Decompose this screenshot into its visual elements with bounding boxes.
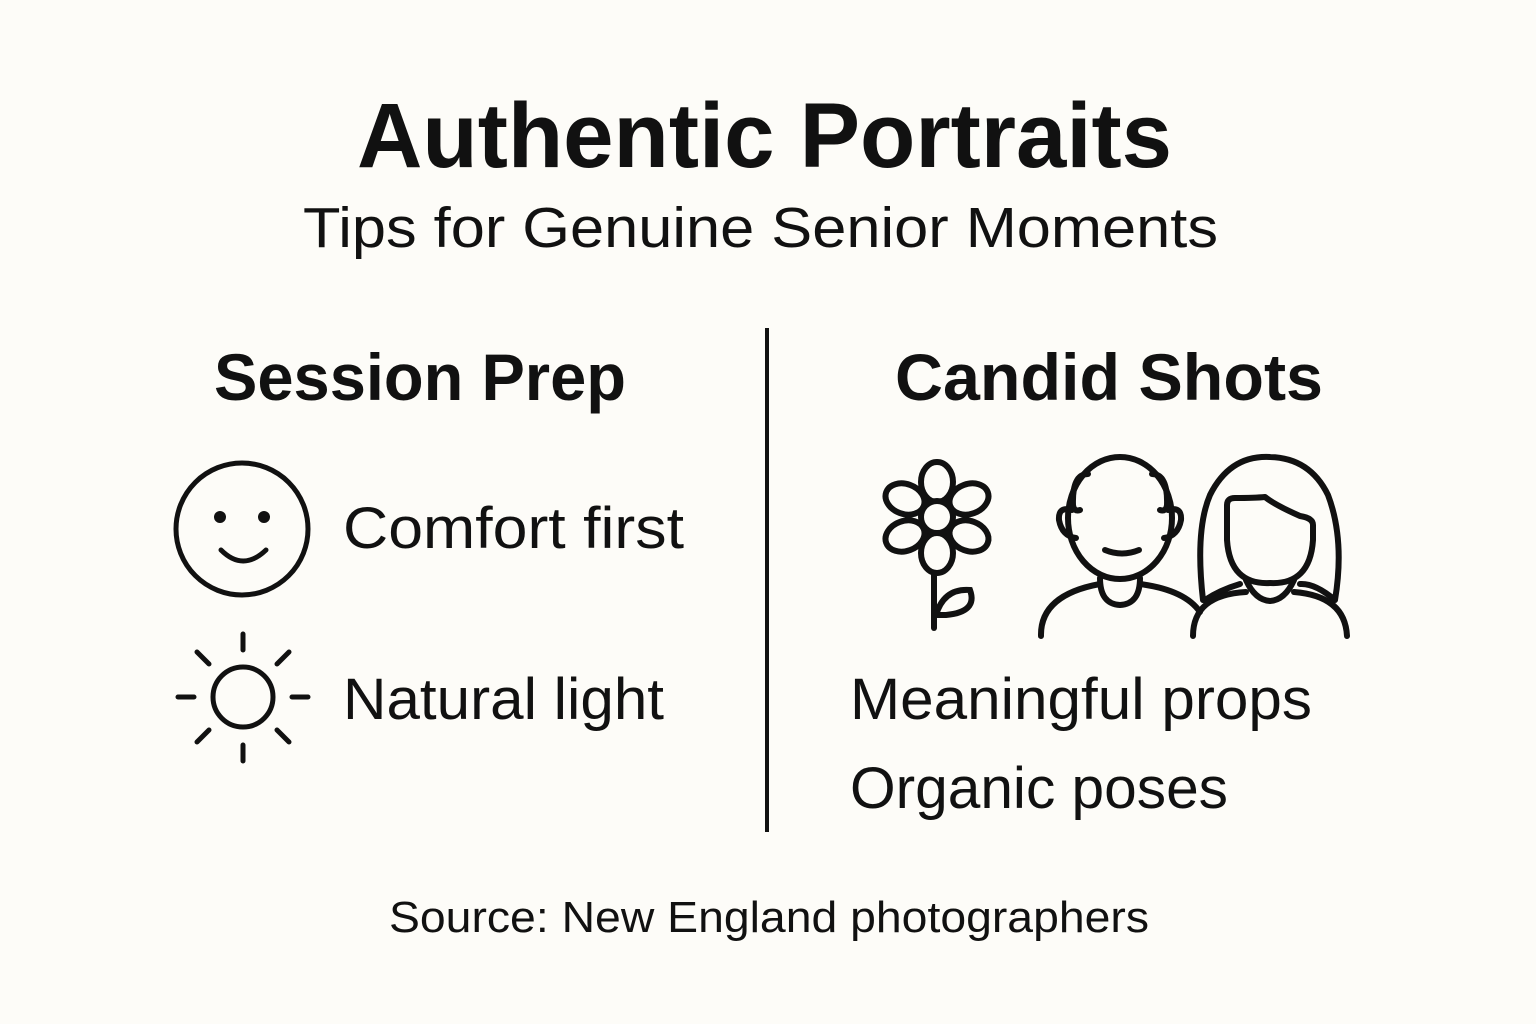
heading: candid shots: Candid Shots <box>895 340 1323 414</box>
icon: flower <box>881 462 993 628</box>
heading: session prep: Session Prep <box>214 340 626 414</box>
text: comfort first: Comfort first <box>343 496 684 561</box>
text: meaningful props: Meaningful props <box>850 667 1312 732</box>
panel: session prep <box>176 340 684 761</box>
source note: Source: New England photographers <box>389 893 1149 942</box>
icon: sun <box>178 634 308 761</box>
title: Authentic Portraits <box>357 85 1172 187</box>
icon: seniors <box>1041 457 1347 636</box>
icon: smiley <box>176 463 308 595</box>
panel: candid shots <box>850 340 1347 821</box>
text: organic poses: Organic poses <box>850 756 1228 821</box>
text: natural light: Natural light <box>343 667 664 732</box>
subtitle: Tips for Genuine Senior Moments <box>303 196 1218 260</box>
